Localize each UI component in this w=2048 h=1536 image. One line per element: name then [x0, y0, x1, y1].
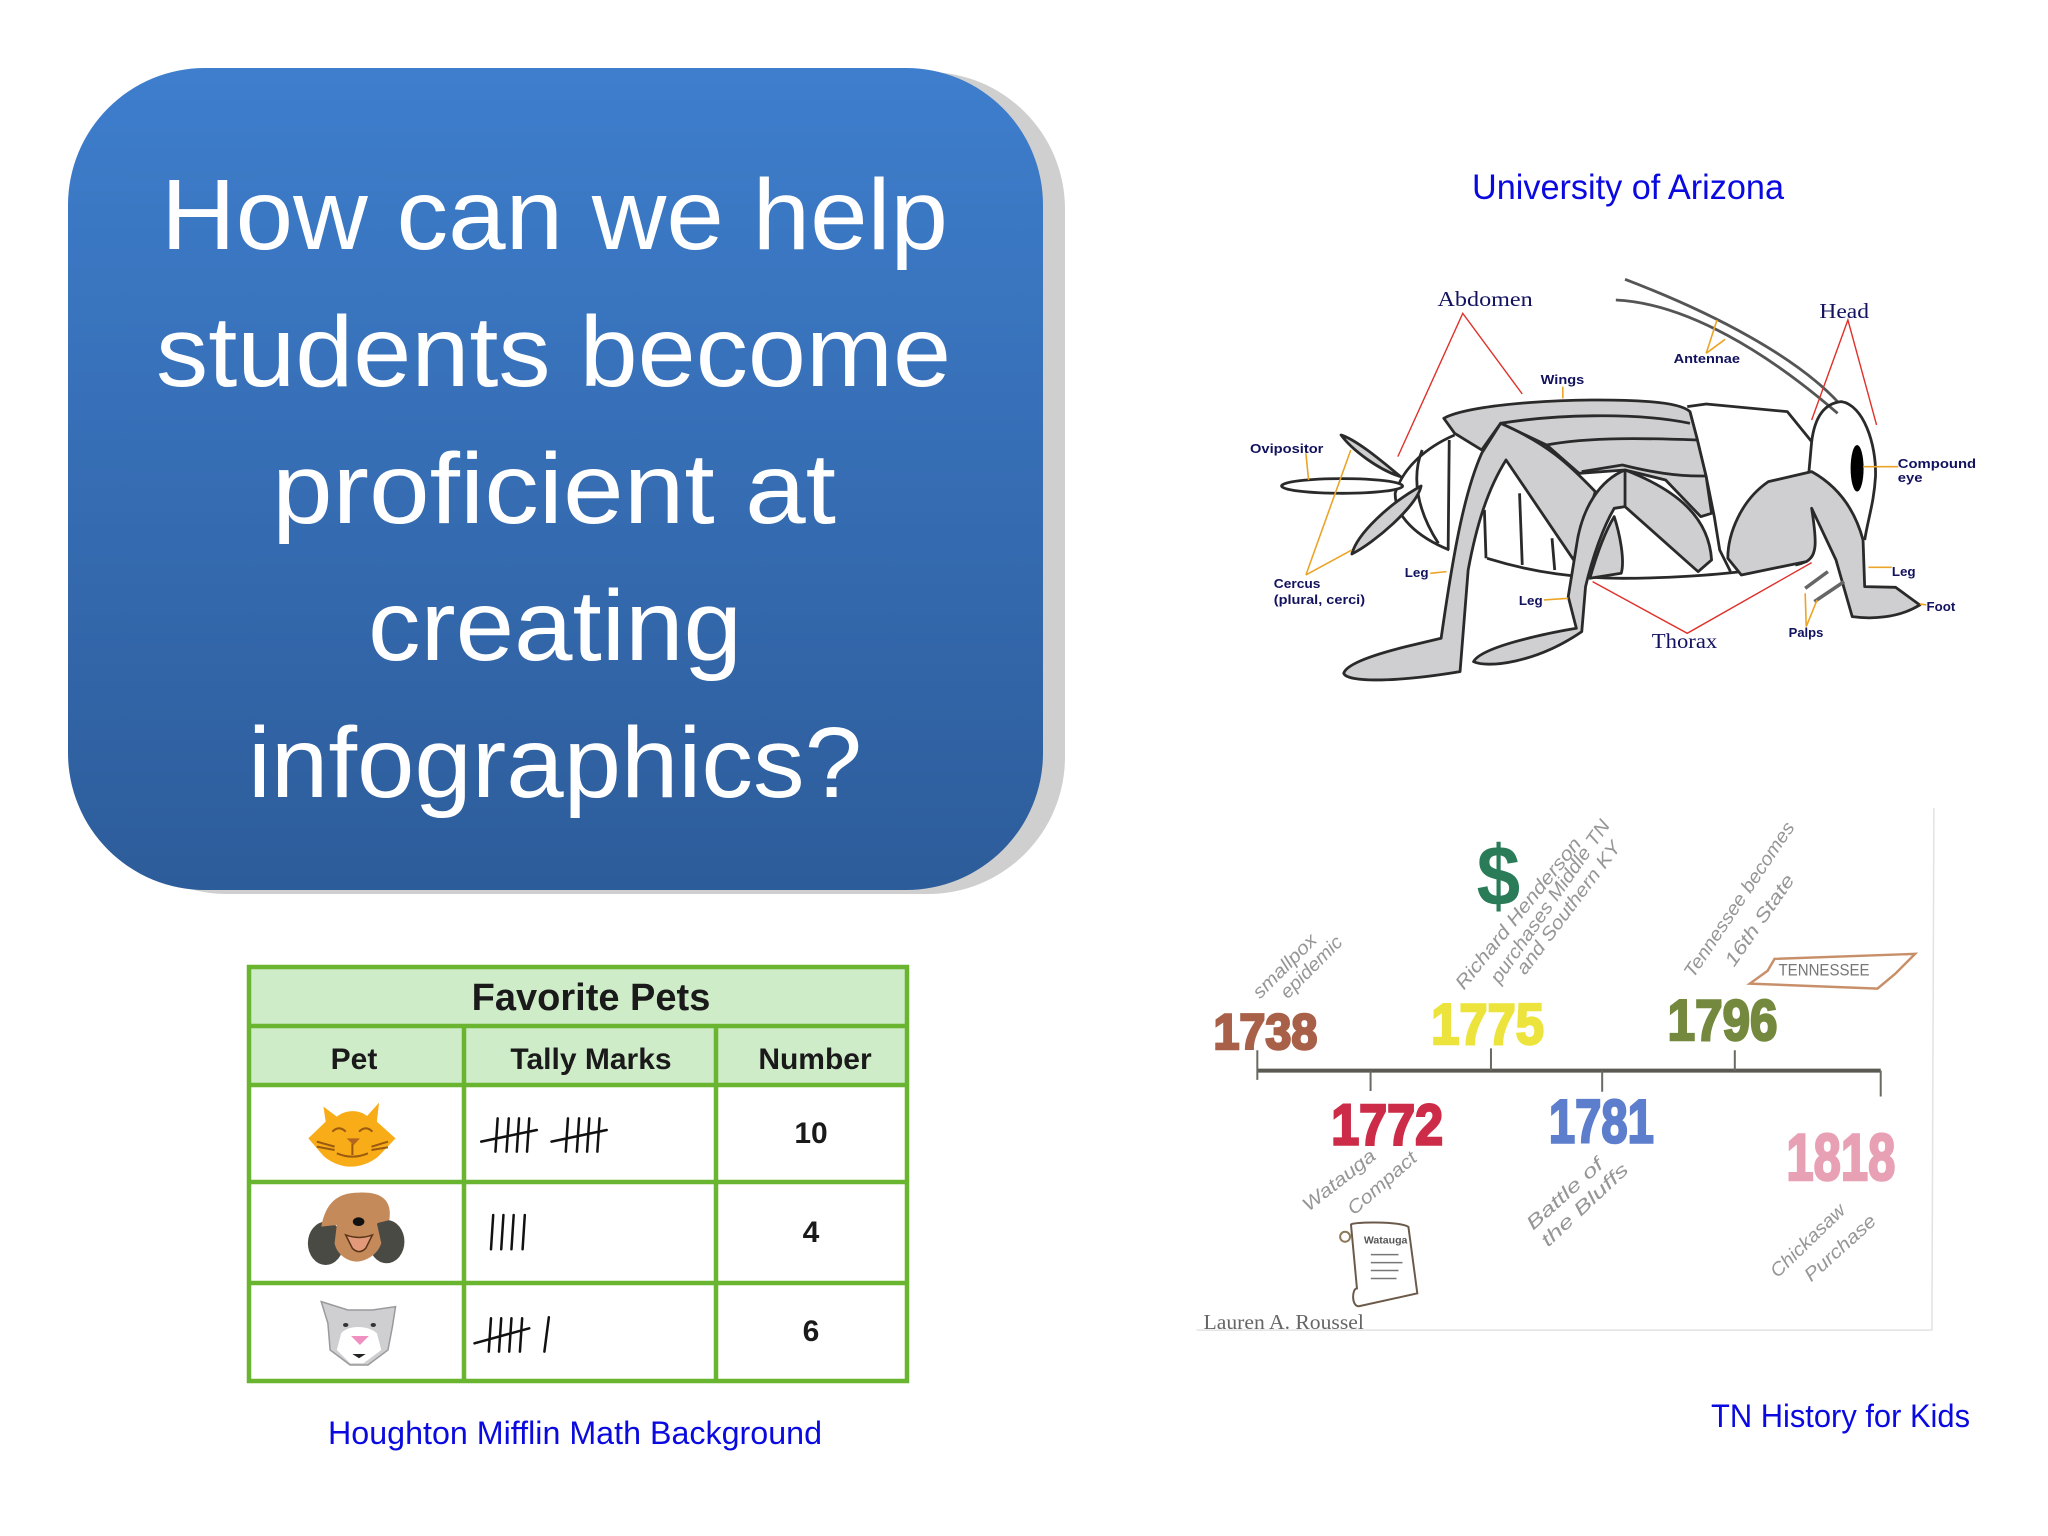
handwritten event notes: smallpox — [1248, 929, 1321, 1002]
table title: Favorite Pets — [472, 977, 710, 1019]
icon: hamster — [321, 1302, 396, 1365]
cricket labels — [1250, 287, 1976, 653]
cricket body drawing — [1282, 279, 1920, 680]
title question text: students become — [156, 296, 951, 408]
handwritten event notes: the Bluffs — [1536, 1158, 1633, 1251]
cricket labels: Wings — [1541, 372, 1584, 387]
cricket labels: (plural, cerci) — [1274, 592, 1365, 607]
icon: dog — [308, 1193, 404, 1265]
cricket labels: Thorax — [1652, 629, 1718, 653]
year labels — [1213, 989, 1895, 1194]
handwritten event notes: Richard Henderson — [1451, 833, 1585, 993]
year labels: 1738 — [1213, 1004, 1317, 1060]
cricket labels: Head — [1819, 299, 1870, 323]
year labels: 1796 — [1668, 989, 1778, 1053]
year labels: 1781 — [1549, 1087, 1654, 1156]
table: Favorite Pets tally chart — [249, 967, 907, 1381]
handwritten event notes: 16th State — [1720, 870, 1799, 970]
handwritten event notes: Watauga — [1298, 1145, 1380, 1215]
number values — [794, 1117, 828, 1348]
handwritten event notes: Purchase — [1800, 1210, 1880, 1285]
column headers: Pet — [331, 1043, 377, 1076]
year labels: 1818 — [1786, 1121, 1895, 1194]
title question text: infographics? — [248, 707, 862, 819]
cricket labels: Abdomen — [1437, 287, 1533, 311]
cricket labels: Antennae — [1674, 351, 1740, 366]
handwritten event notes: Battle of — [1522, 1152, 1609, 1234]
column headers — [331, 1043, 872, 1076]
icon: Tennessee state outline: TENNESSEE — [1779, 961, 1870, 980]
cricket labels: Compound — [1898, 456, 1976, 471]
title question text — [156, 159, 951, 819]
icon: Watauga Compact scroll — [1340, 1222, 1417, 1306]
red and orange leader lines — [1306, 313, 1926, 633]
title question text: creating — [368, 570, 742, 682]
timeline axis and ticks — [1257, 1048, 1881, 1097]
column headers: Tally Marks — [510, 1043, 672, 1076]
handwritten event notes: epidemic — [1276, 931, 1347, 1002]
handwritten event notes: and Southern KY — [1512, 836, 1626, 978]
number values: 4 — [803, 1216, 820, 1249]
title question text: How can we help — [161, 159, 948, 271]
chart: Tennessee history timeline — [1197, 808, 1934, 1334]
table header fills — [249, 967, 907, 1381]
icon: cat — [308, 1103, 396, 1167]
icon: Watauga Compact scroll: Watauga — [1364, 1236, 1408, 1247]
handwritten event notes: Compact — [1343, 1146, 1421, 1219]
column headers: Number — [758, 1043, 872, 1076]
year labels: 1775 — [1431, 993, 1544, 1057]
number values: 6 — [803, 1315, 819, 1348]
cricket labels: Foot — [1927, 599, 1956, 614]
tally marks — [475, 1118, 607, 1352]
timeline frame — [1197, 808, 1934, 1330]
handwritten event notes: Tennessee becomes — [1679, 817, 1799, 981]
handwritten event notes — [1248, 815, 1880, 1285]
title question text: proficient at — [272, 433, 836, 545]
caption: University of Arizona: University of Arizona — [1472, 168, 1785, 207]
panel: question callout — [68, 68, 1065, 894]
number values: 10 — [794, 1117, 828, 1150]
caption: Houghton Mifflin Math Background: Houghton Mifflin Math Background — [328, 1415, 822, 1451]
handwritten event notes: Chickasaw — [1766, 1198, 1850, 1281]
table grid — [249, 967, 907, 1381]
cricket labels: Leg — [1519, 593, 1543, 608]
year labels: 1772 — [1331, 1093, 1443, 1157]
cricket labels: Cercus — [1274, 576, 1320, 591]
cricket labels: Ovipositor — [1250, 441, 1323, 456]
cricket labels: Palps — [1789, 625, 1823, 640]
cricket labels: Leg — [1892, 564, 1916, 579]
cricket labels: eye — [1898, 470, 1923, 485]
caption: TN History for Kids: TN History for Kids — [1711, 1398, 1970, 1434]
cricket labels: Leg — [1405, 565, 1429, 580]
icon: dollar sign: $ — [1477, 829, 1520, 924]
handwritten event notes: purchases Middle TN — [1485, 815, 1614, 988]
signature: Lauren A. Roussel — [1204, 1310, 1364, 1334]
diagram: labelled cricket — [1250, 279, 1976, 680]
icon: Tennessee state outline — [1750, 954, 1915, 989]
